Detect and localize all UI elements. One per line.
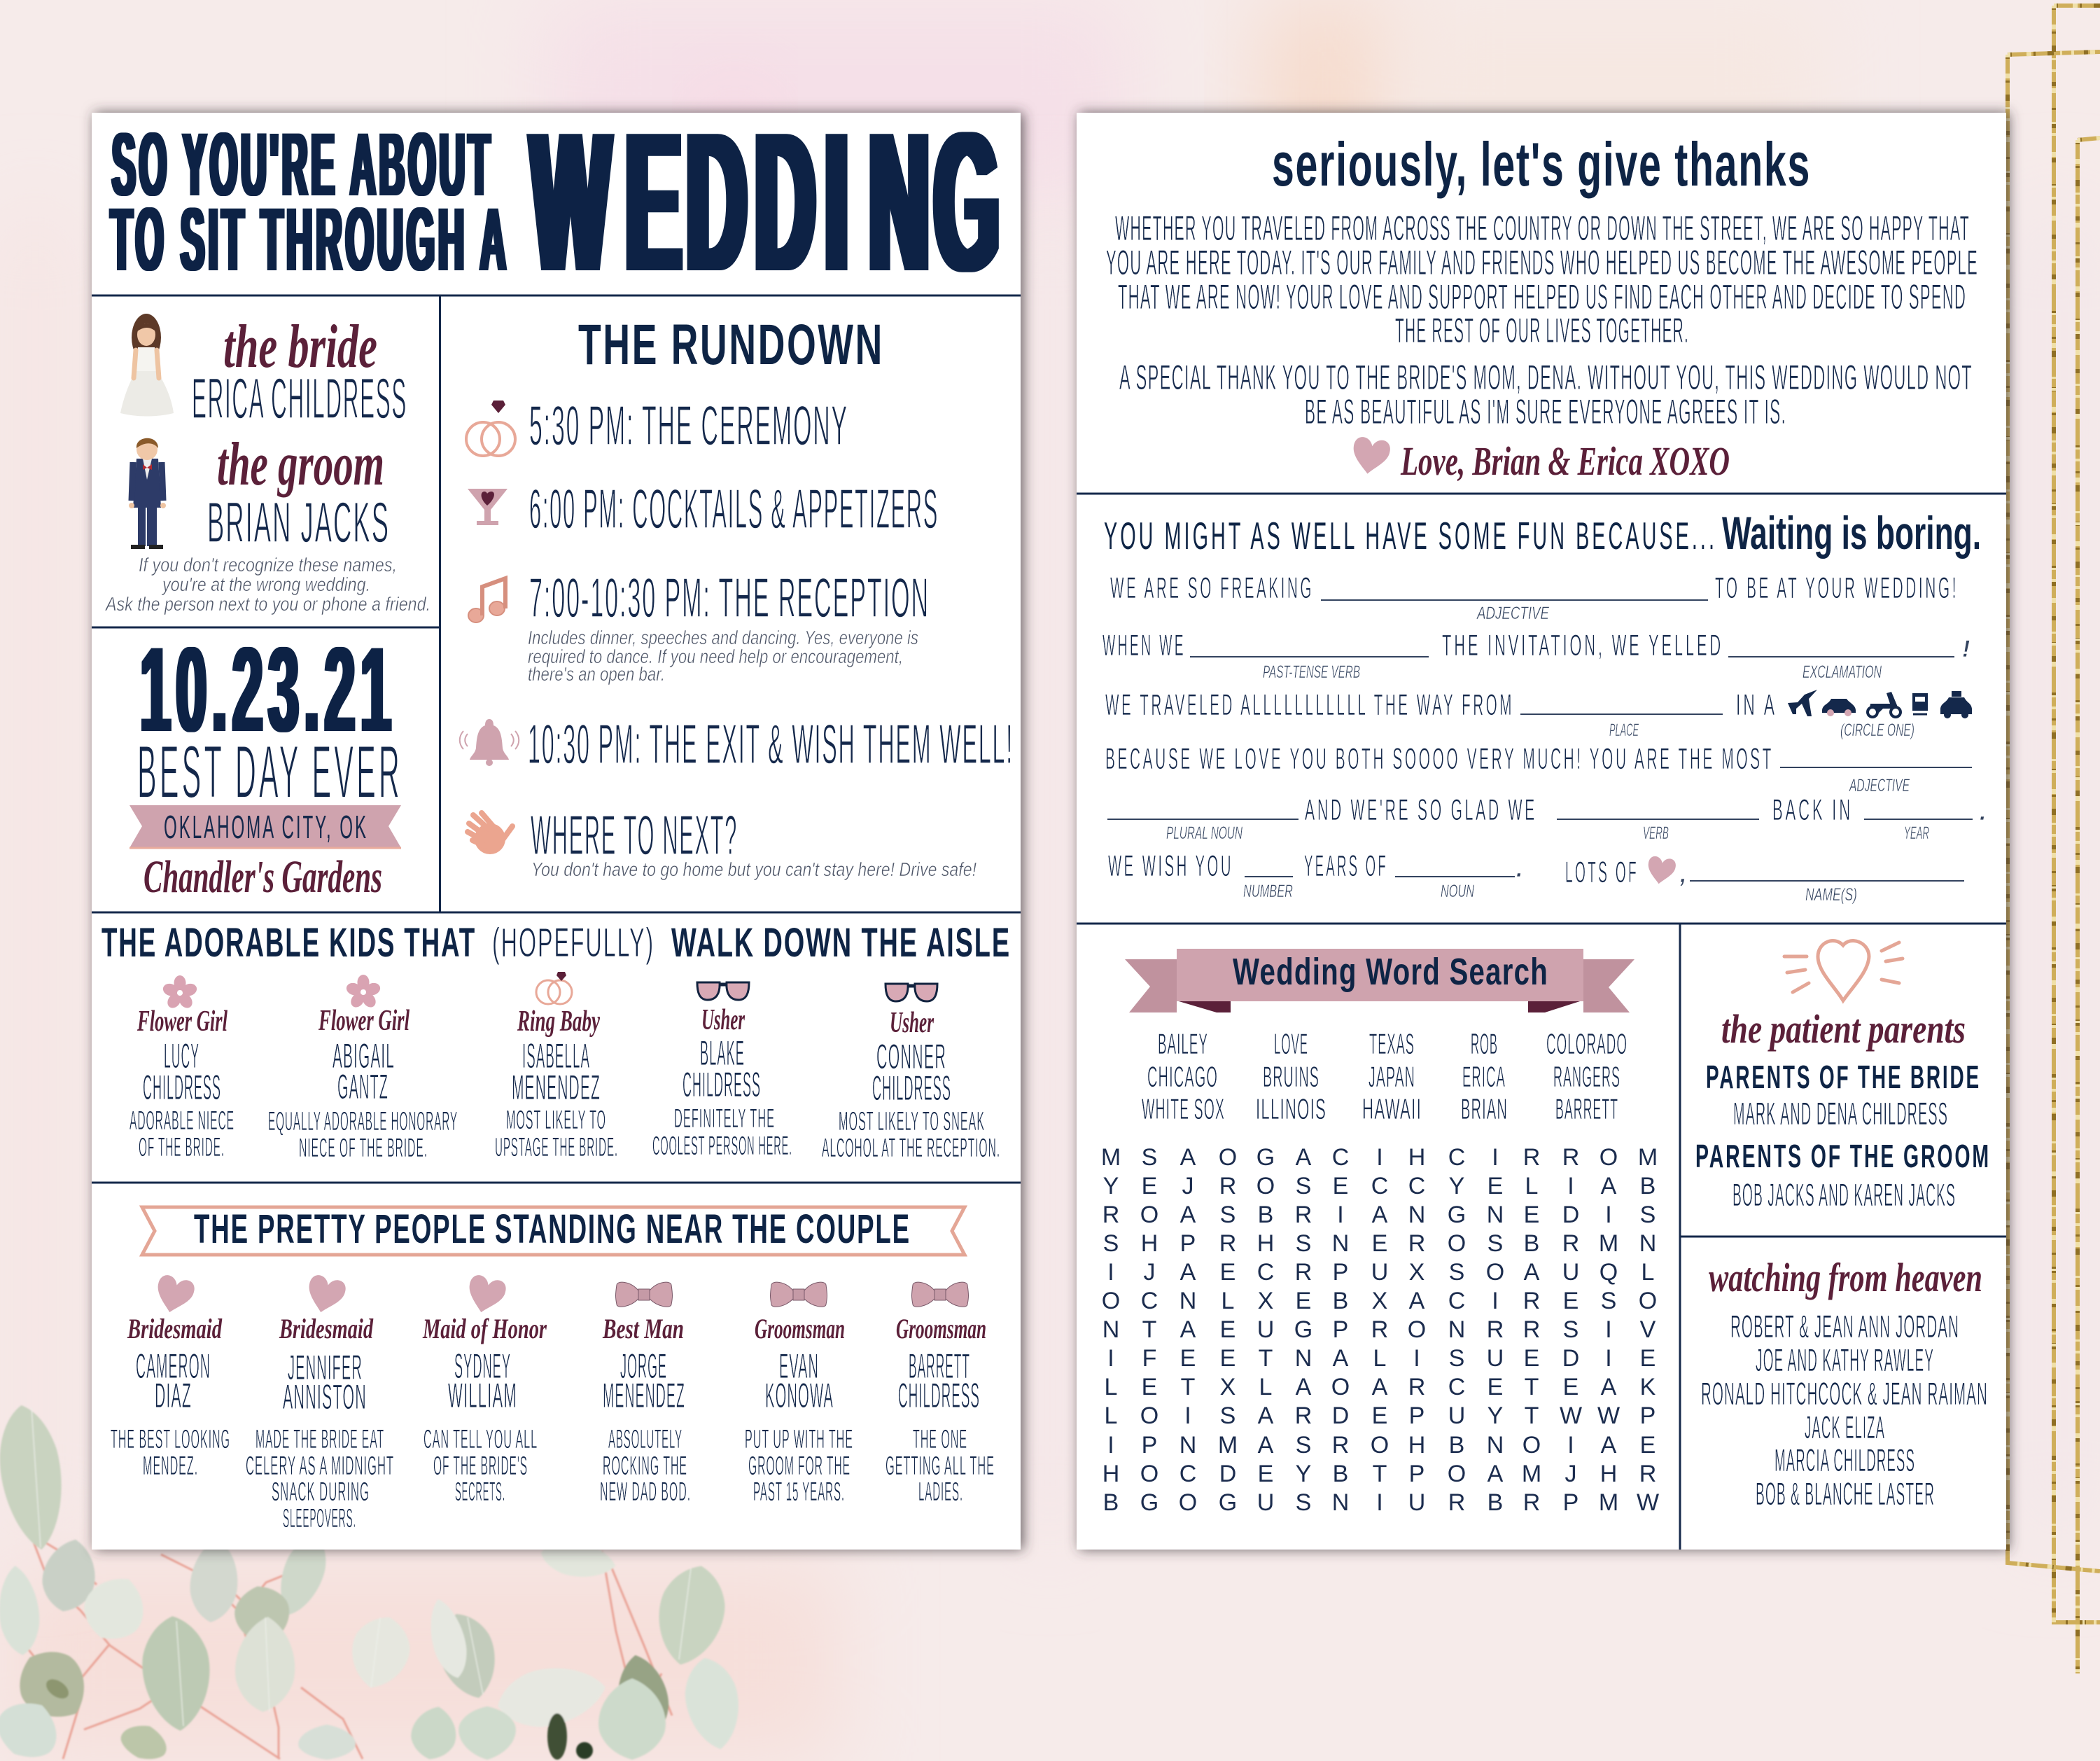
text: 10:30 PM: THE EXIT & WISH THEM WELL! bbox=[528, 713, 1014, 775]
row 5: YEAR bbox=[1904, 823, 1929, 843]
letter grid: LOISARDEPUYTWWP bbox=[1105, 1402, 1656, 1429]
panel: kids in the aisle: OF THE BRIDE. bbox=[139, 1133, 225, 1162]
text: names list bbox=[1701, 1309, 1988, 1512]
panel: wedding party: ABSOLUTELY bbox=[608, 1425, 682, 1454]
word list: ROB bbox=[1471, 1027, 1498, 1060]
text: thank you message: THE REST OF OUR LIVES TOGETHER. bbox=[1395, 311, 1689, 350]
panel: left card: BEST DAY EVER bbox=[137, 730, 402, 814]
panel: the rundown: 7:00-10:30 PM: THE RECEPTION bbox=[529, 566, 930, 629]
kid: Conner Childress bbox=[822, 984, 1000, 1163]
panel: kids in the aisle: EQUALLY ADORABLE HONORARY bbox=[268, 1107, 458, 1136]
row 5: . bbox=[1980, 799, 1986, 826]
panel: word search bbox=[1101, 949, 1659, 1516]
person: Sydney William bbox=[422, 1273, 547, 1507]
panel: watching from heaven bbox=[1701, 1255, 1988, 1512]
letter grid: YEJROSECCYELIAB bbox=[1103, 1173, 1656, 1199]
row 1: WE ARE SO FREAKING bbox=[1110, 571, 1314, 605]
heading: adorable kids: (HOPEFULLY) bbox=[492, 920, 654, 966]
letter grid: SHPRHSNEROSBRMN bbox=[1103, 1230, 1656, 1257]
title bbox=[111, 91, 999, 312]
letter grid: MSAOGACIHCIRROM bbox=[1101, 1144, 1658, 1171]
row 4: ADJECTIVE bbox=[1849, 776, 1910, 795]
row 6: NAME(S) bbox=[1805, 885, 1857, 905]
word list: CHICAGO bbox=[1147, 1060, 1218, 1093]
row 6: NUMBER bbox=[1243, 882, 1293, 901]
kid: Isabella Menendez: Ring Baby bbox=[517, 1005, 600, 1038]
heading: some fun: Waiting is boring. bbox=[1722, 507, 1981, 559]
kid: Conner Childress: CHILDRESS bbox=[872, 1069, 951, 1108]
row 5: PLURAL NOUN bbox=[1166, 823, 1243, 843]
kid: Abigail Gantz bbox=[268, 975, 458, 1163]
icon: rings bbox=[466, 401, 515, 456]
person: Jennifer Anniston: JENNIFER bbox=[288, 1348, 363, 1387]
text: wrong wedding note: you're at the wrong wedding. bbox=[161, 573, 370, 595]
letter grid: BGOGUSNIURBRPMW bbox=[1103, 1489, 1659, 1516]
row 6 bbox=[1108, 849, 1964, 905]
person: Evan Konowa: Groomsman bbox=[755, 1313, 845, 1344]
panel: wedding party: PAST 15 YEARS. bbox=[753, 1477, 845, 1507]
panel: wedding party: MADE THE BRIDE EAT bbox=[255, 1425, 384, 1454]
gold frame lines bbox=[2008, 6, 2100, 1673]
row 6: LOTS OF bbox=[1565, 856, 1639, 889]
ribbon heading: word search: Wedding Word Search bbox=[1233, 951, 1548, 993]
kid: Lucy Childress: Flower Girl bbox=[136, 1005, 227, 1038]
word list: ILLINOIS bbox=[1256, 1092, 1326, 1125]
letter grid: HOCDEYBTPOAMJHR bbox=[1102, 1461, 1656, 1487]
letter grid: ROASBRIANGNEDIS bbox=[1102, 1202, 1656, 1228]
word list: BRUINS bbox=[1263, 1060, 1320, 1093]
text: 6:00 PM: COCKTAILS & APPETIZERS bbox=[529, 478, 939, 540]
person: Cameron Diaz: Bridesmaid bbox=[127, 1313, 223, 1344]
row 6: WE WISH YOU bbox=[1108, 849, 1233, 883]
ribbon: location bbox=[130, 805, 401, 848]
heading: adorable kids bbox=[102, 920, 1011, 966]
panel: word search: BARRETT bbox=[1555, 1092, 1618, 1125]
row 3: (CIRCLE ONE) bbox=[1840, 721, 1914, 740]
panel: left card bbox=[92, 91, 1021, 1550]
icon: cocktail bbox=[468, 489, 507, 525]
panel: kids in the aisle: ADORABLE NIECE bbox=[130, 1106, 234, 1136]
title: SO YOU'RE ABOUT bbox=[112, 115, 493, 215]
kid: Isabella Menendez bbox=[495, 972, 618, 1162]
row 5: BACK IN bbox=[1772, 793, 1853, 827]
person: Jennifer Anniston bbox=[246, 1273, 394, 1533]
kid: Conner Childress: Usher bbox=[890, 1007, 934, 1039]
text: reception detail: there's an open bar. bbox=[528, 663, 665, 685]
panel: wedding party: MENENDEZ bbox=[603, 1376, 685, 1415]
person: Cameron Diaz: MENDEZ. bbox=[143, 1452, 198, 1481]
row 3 bbox=[1105, 688, 1972, 740]
row 1: ADJECTIVE bbox=[1476, 604, 1549, 623]
panel: left card: ERICA CHILDRESS bbox=[192, 367, 407, 431]
person: Sydney William: WILLIAM bbox=[448, 1376, 517, 1415]
text: signature: Love, Brian & Erica XOXO bbox=[1400, 438, 1730, 484]
ribbon heading: pretty people bbox=[142, 1206, 965, 1255]
person: Barrett Childress: THE ONE bbox=[913, 1425, 967, 1454]
row 6: YEARS OF bbox=[1304, 849, 1388, 883]
panel: kids in the aisle: COOLEST PERSON HERE. bbox=[652, 1132, 792, 1161]
text: ALCOHOL AT THE RECEPTION. bbox=[822, 1134, 1000, 1163]
panel: the rundown: WHERE TO NEXT? bbox=[531, 804, 738, 866]
text: names list: JACK ELIZA bbox=[1805, 1410, 1885, 1445]
text: reception detail: Includes dinner, speeches and dancing. Yes, everyone is bbox=[528, 627, 918, 648]
letter grid: IPNMASROHBNOIAE bbox=[1107, 1432, 1656, 1459]
icon: bride bbox=[120, 314, 174, 416]
panel: the rundown bbox=[460, 313, 1014, 880]
panel: wedding party: OF THE BRIDE'S bbox=[433, 1452, 528, 1481]
panel: kids in the aisle: CHILDRESS bbox=[143, 1068, 221, 1107]
panel: bride and groom bbox=[104, 313, 430, 615]
word list: JAPAN bbox=[1368, 1060, 1415, 1093]
title: WEDDING bbox=[531, 91, 999, 312]
kid: Abigail Gantz: Flower Girl bbox=[318, 1005, 410, 1037]
text: the patient parents: the patient parents bbox=[1721, 1006, 1966, 1052]
letter grid: NTAEUGPRONRRSIV bbox=[1102, 1316, 1656, 1343]
panel: wedding party: CELERY AS A MIDNIGHT bbox=[246, 1452, 394, 1481]
word list: HAWAII bbox=[1362, 1092, 1422, 1125]
word list: LOVE bbox=[1274, 1027, 1308, 1060]
icon: bell bbox=[460, 719, 519, 766]
word list: WHITE SOX bbox=[1142, 1092, 1225, 1125]
person: Sydney William: Maid of Honor bbox=[422, 1313, 547, 1344]
text: venue: Chandler's Gardens bbox=[144, 851, 382, 903]
panel: wedding party: CAN TELL YOU ALL bbox=[424, 1425, 538, 1454]
person: Evan Konowa bbox=[745, 1282, 853, 1507]
row 1 bbox=[1110, 571, 1959, 623]
person: Jennifer Anniston: Bridesmaid bbox=[279, 1313, 374, 1344]
panel: right card bbox=[1077, 113, 2006, 1550]
kid: Abigail Gantz: NIECE OF THE BRIDE. bbox=[299, 1134, 428, 1163]
ribbon heading: word search bbox=[1125, 949, 1634, 1012]
row 2: PAST-TENSE VERB bbox=[1263, 662, 1360, 682]
kid: Blake Childress: Usher bbox=[701, 1004, 745, 1036]
icons: transport bbox=[1788, 690, 1972, 718]
heading: adorable kids: THE ADORABLE KIDS THAT bbox=[102, 920, 476, 966]
panel: wedding party: PUT UP WITH THE bbox=[745, 1425, 853, 1454]
icon: waving hands bbox=[468, 813, 512, 854]
heading: seriously, let's give thanks: seriously, let's give thanks bbox=[1272, 130, 1811, 199]
panel: the rundown: 5:30 PM: THE CEREMONY bbox=[529, 394, 848, 457]
word list: TEXAS bbox=[1369, 1027, 1415, 1060]
row 5: AND WE'RE SO GLAD WE bbox=[1305, 793, 1537, 827]
row 2 bbox=[1102, 629, 1970, 682]
title: TO SIT THROUGH A bbox=[111, 190, 510, 290]
person: Barrett Childress: Groomsman bbox=[896, 1313, 986, 1344]
ribbon heading: pretty people: THE PRETTY PEOPLE STANDING NEAR THE COUPLE bbox=[194, 1206, 911, 1252]
kid: Lucy Childress: LUCY bbox=[164, 1036, 200, 1076]
row 5: VERB bbox=[1643, 823, 1669, 843]
panel: thanks bbox=[1106, 130, 1978, 484]
panel: kids in the aisle: MOST LIKELY TO SNEAK bbox=[839, 1107, 985, 1136]
text: the bride: the bride bbox=[223, 313, 377, 381]
icon: outlined heart with rays bbox=[1784, 940, 1903, 1001]
row 3: IN A bbox=[1736, 688, 1777, 722]
heading: adorable kids: WALK DOWN THE AISLE bbox=[671, 920, 1011, 966]
panel: wedding party: CAMERON bbox=[136, 1346, 211, 1386]
person: Jorge Menendez: Best Man bbox=[602, 1313, 684, 1344]
person: Jennifer Anniston: SNACK DURING bbox=[272, 1477, 370, 1507]
kid: Conner Childress: CONNER bbox=[876, 1037, 946, 1076]
text: wrong wedding note: Ask the person next to you or phone a friend. bbox=[104, 593, 430, 615]
text: reception detail: required to dance. If you need help or encouragement, bbox=[528, 646, 903, 667]
panel: kids in the aisle: MOST LIKELY TO bbox=[506, 1106, 606, 1135]
row 5 bbox=[1107, 793, 1986, 843]
panel: word search: RANGERS bbox=[1553, 1060, 1620, 1093]
row 6: . bbox=[1516, 856, 1522, 882]
word list: ERICA bbox=[1462, 1060, 1506, 1093]
ribbon: location: OKLAHOMA CITY, OK bbox=[164, 809, 368, 845]
row 3: WE TRAVELED ALLLLLLLLLLL THE WAY FROM bbox=[1105, 688, 1514, 722]
letter grid: IJAECRPUXSOAUQL bbox=[1107, 1259, 1654, 1286]
word list: BAILEY bbox=[1158, 1027, 1208, 1060]
panel: wedding party bbox=[111, 1206, 995, 1533]
letter grid: OCNLXEBXACIRESO bbox=[1102, 1288, 1657, 1314]
panel: date and venue bbox=[130, 622, 402, 903]
kid: Lucy Childress bbox=[130, 975, 234, 1162]
person: Jorge Menendez: JORGE bbox=[620, 1346, 667, 1386]
letter grid bbox=[1101, 1144, 1659, 1516]
panel: kids in the aisle bbox=[102, 920, 1011, 1163]
panel: wedding party: THE BEST LOOKING bbox=[111, 1425, 230, 1454]
kid: Blake Childress: BLAKE bbox=[700, 1033, 745, 1073]
person: Barrett Childress: LADIES. bbox=[918, 1477, 963, 1507]
row 4 bbox=[1105, 742, 1972, 795]
text: watching from heaven: watching from heaven bbox=[1709, 1255, 1982, 1300]
icon: music note bbox=[468, 578, 505, 622]
text: thank you message bbox=[1106, 209, 1978, 431]
heading: the rundown: THE RUNDOWN bbox=[578, 313, 884, 377]
panel: wedding party: NEW DAD BOD. bbox=[600, 1477, 691, 1507]
person: Jennifer Anniston: SLEEPOVERS. bbox=[283, 1504, 356, 1533]
person: Barrett Childress bbox=[886, 1282, 995, 1507]
word list: BRIAN bbox=[1461, 1092, 1508, 1125]
text: drive safe: You don't have to go home but you can't stay here! Drive safe! bbox=[531, 858, 976, 880]
row 6: NOUN bbox=[1441, 882, 1475, 901]
person: Evan Konowa: EVAN bbox=[779, 1346, 819, 1386]
panel: word search: COLORADO bbox=[1546, 1027, 1628, 1060]
eucalyptus leaves bbox=[0, 1401, 746, 1761]
panel: left card: CHILDRESS bbox=[898, 1376, 980, 1415]
panel: left card: BARRETT bbox=[909, 1346, 970, 1386]
panel: wedding party: GROOM FOR THE bbox=[748, 1452, 850, 1481]
text: the groom: the groom bbox=[217, 431, 384, 499]
row 6: , bbox=[1679, 861, 1686, 888]
text: reception detail bbox=[528, 627, 918, 685]
text: wrong wedding note bbox=[104, 554, 430, 615]
kid: Blake Childress: DEFINITELY THE bbox=[674, 1104, 775, 1134]
kid: Blake Childress bbox=[652, 982, 792, 1161]
kid: Abigail Gantz: GANTZ bbox=[337, 1067, 388, 1106]
icon: heart bbox=[1350, 436, 1392, 477]
kid: Abigail Gantz: ABIGAIL bbox=[332, 1036, 395, 1076]
letter grid: LETXLAOARCETEAK bbox=[1105, 1374, 1656, 1400]
panel: left card: GETTING ALL THE bbox=[886, 1452, 995, 1481]
word list bbox=[1142, 1027, 1628, 1125]
panel: patient parents bbox=[1695, 940, 1991, 1213]
letter grid: IFEETNALISUEDIE bbox=[1107, 1345, 1656, 1372]
row 2: ! bbox=[1962, 636, 1970, 662]
person: Jennifer Anniston: ANNISTON bbox=[283, 1377, 367, 1417]
row 3: PLACE bbox=[1609, 721, 1639, 740]
kid: Isabella Menendez: ISABELLA bbox=[522, 1036, 590, 1076]
row 2: EXCLAMATION bbox=[1802, 662, 1882, 682]
text: wrong wedding note: If you don't recognize these names, bbox=[139, 554, 397, 576]
panel: kids in the aisle: UPSTAGE THE BRIDE. bbox=[495, 1133, 618, 1162]
kid: Isabella Menendez: MENENDEZ bbox=[512, 1068, 601, 1107]
panel: mad libs bbox=[1102, 507, 1986, 905]
person: Sydney William: SYDNEY bbox=[454, 1346, 511, 1386]
panel: left card: 10.23.21 bbox=[140, 622, 396, 757]
person: Evan Konowa: KONOWA bbox=[765, 1376, 834, 1415]
row 2: THE INVITATION, WE YELLED bbox=[1442, 629, 1723, 662]
person: Sydney William: SECRETS. bbox=[455, 1477, 505, 1507]
person: Cameron Diaz bbox=[111, 1273, 230, 1481]
person: Cameron Diaz: DIAZ bbox=[155, 1376, 192, 1415]
kid: Blake Childress: CHILDRESS bbox=[682, 1065, 761, 1104]
icon: groom bbox=[129, 438, 166, 549]
row 2: WHEN WE bbox=[1102, 629, 1186, 662]
panel: bride and groom: BRIAN JACKS bbox=[207, 491, 390, 555]
panel: wedding party: ROCKING THE bbox=[603, 1452, 687, 1481]
person: Jorge Menendez bbox=[600, 1282, 691, 1507]
